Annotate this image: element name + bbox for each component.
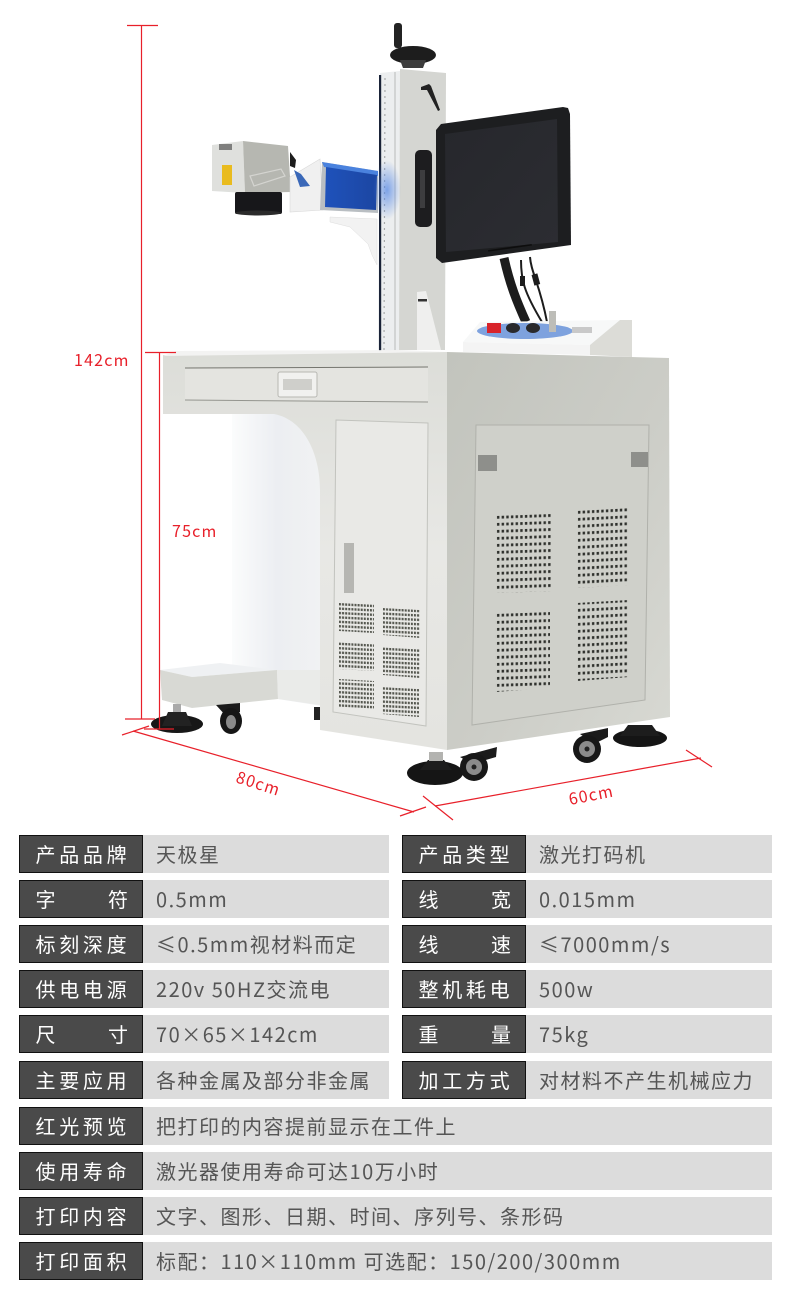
row: 供电电源 — [19, 970, 389, 1008]
row: 供电电源: 220v 50HZ交流电 — [156, 974, 331, 1003]
panel: machine cabinet — [163, 350, 670, 750]
row: 整机耗电 — [402, 970, 772, 1008]
row: 字符: 字 — [36, 884, 59, 913]
dimension: 80cm width: 80cm — [233, 764, 284, 801]
row: 红光预览: 红光预览 — [36, 1111, 130, 1140]
row: 打印面积 — [19, 1242, 772, 1280]
row: 字符: 0.5mm — [156, 884, 228, 913]
row: 打印面积: 标配：110×110mm 可选配：150/200/300mm — [156, 1246, 622, 1275]
row: 使用寿命 — [19, 1152, 772, 1190]
row: 红光预览: 把打印的内容提前显示在工件上 — [156, 1111, 457, 1140]
icon: laser scan head — [212, 141, 296, 216]
row: 打印内容: 打印内容 — [36, 1201, 130, 1230]
row: 尺寸 — [19, 1015, 389, 1053]
row: 打印内容: 文字、图形、日期、时间、序列号、条形码 — [156, 1201, 564, 1230]
row: 产品类型: 激光打码机 — [539, 839, 646, 868]
dimension: 60cm depth: 60cm — [566, 778, 616, 810]
dimension: 80cm width — [122, 726, 426, 816]
row: 尺寸: 寸 — [108, 1019, 128, 1048]
row: 产品类型 — [402, 835, 772, 873]
row: 产品类型: 产品类型 — [418, 839, 513, 868]
row: 主要应用 — [19, 1061, 389, 1099]
row: 标刻深度: 标刻深度 — [36, 929, 130, 958]
dimension: 142cm height: 142cm — [74, 347, 130, 371]
row: 线宽: 线 — [418, 884, 442, 913]
icon: blue laser tube and bracket — [290, 159, 401, 265]
row: 尺寸: 尺 — [36, 1019, 59, 1048]
row: 尺寸: 70×65×142cm — [156, 1019, 319, 1048]
row: 重量: 75kg — [539, 1019, 589, 1048]
row: 重量 — [402, 1015, 772, 1053]
row: 加工方式: 加工方式 — [418, 1065, 513, 1094]
row: 主要应用: 主要应用 — [36, 1065, 130, 1094]
dimension: 60cm depth — [423, 750, 712, 820]
row: 线速: 线 — [418, 929, 442, 958]
row: 线速: ≤7000mm/s — [539, 929, 671, 958]
row: 主要应用: 各种金属及部分非金属 — [156, 1065, 371, 1094]
row: 线宽: 宽 — [491, 884, 511, 913]
drawer with handle — [185, 367, 428, 402]
icon: cables — [504, 257, 547, 322]
icon: control panel box — [463, 311, 632, 357]
row: 整机耗电: 500w — [539, 974, 594, 1003]
icon: monitor — [415, 107, 571, 263]
row: 标刻深度: ≤0.5mm视材料而定 — [156, 929, 357, 958]
row: 字符: 符 — [108, 884, 128, 913]
row: 线宽 — [402, 880, 772, 918]
row: 使用寿命: 激光器使用寿命可达10万小时 — [156, 1156, 439, 1185]
row: 产品品牌 — [19, 835, 389, 873]
product illustration with dimension lines — [74, 23, 712, 820]
row: 加工方式 — [402, 1061, 772, 1099]
side panel door with vents and latches — [472, 425, 649, 725]
row: 使用寿命: 使用寿命 — [36, 1156, 130, 1185]
icon: laser column and handwheel — [378, 23, 446, 351]
small door with vents — [333, 420, 428, 726]
row: 重量: 重 — [418, 1019, 442, 1048]
row: 打印面积: 打印面积 — [36, 1246, 130, 1275]
dimension: 75cm height: 75cm — [172, 518, 218, 542]
row: 重量: 量 — [491, 1019, 511, 1048]
row: 线速: 速 — [491, 929, 511, 958]
feet and casters — [151, 703, 667, 785]
row: 标刻深度 — [19, 925, 389, 963]
row: 红光预览 — [19, 1107, 772, 1145]
row: 产品品牌: 天极星 — [156, 839, 220, 868]
row: 线速 — [402, 925, 772, 963]
row: 供电电源: 供电电源 — [36, 974, 130, 1003]
row: 产品品牌: 产品品牌 — [36, 839, 130, 868]
footrest box — [160, 663, 320, 708]
row: 整机耗电: 整机耗电 — [418, 974, 513, 1003]
row: 打印内容 — [19, 1197, 772, 1235]
row: 字符 — [19, 880, 389, 918]
row: 加工方式: 对材料不产生机械应力 — [539, 1065, 754, 1094]
row: 线宽: 0.015mm — [539, 884, 636, 913]
spec table — [19, 835, 772, 1280]
